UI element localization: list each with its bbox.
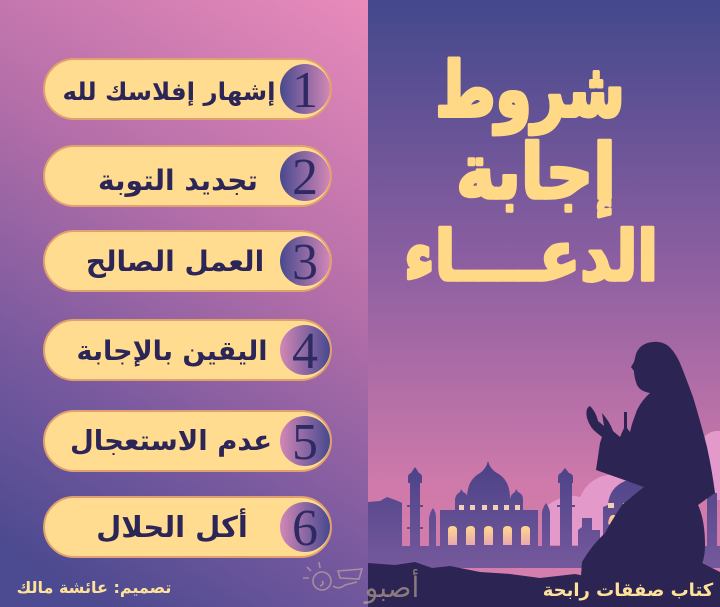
- list item 4: اليقين بالإجابة: [76, 336, 268, 367]
- title: شروط: [435, 47, 625, 135]
- lit windows: [448, 515, 618, 545]
- watermark logo: [303, 562, 419, 604]
- list item 6: [44, 497, 331, 557]
- list item 6: أكل الحلال: [96, 508, 248, 544]
- title: الدعــــاء: [404, 217, 658, 297]
- list item 5: [44, 411, 331, 471]
- book credit: كتاب صفقات رابحة: [543, 580, 714, 601]
- illustration: mosque skyline: [368, 431, 720, 568]
- pale cloud: [545, 474, 690, 545]
- list item 3: 3: [292, 234, 318, 291]
- list item 2: [44, 146, 331, 206]
- list item 3: العمل الصالح: [86, 245, 264, 278]
- list item 6: 6: [292, 500, 318, 557]
- list item 5: عدم الاستعجال: [70, 425, 272, 457]
- illustration: praying woman silhouette: [581, 342, 715, 580]
- watermark logo: أصبو: [363, 568, 419, 604]
- list item 5: 5: [292, 414, 318, 471]
- list item 1: 1: [292, 62, 318, 119]
- list item 1: إشهار إفلاسك لله: [62, 77, 276, 106]
- list item 2: تجديد التوبة: [98, 164, 258, 197]
- list item 4: 4: [292, 323, 318, 380]
- illustration: dark ground: [368, 562, 720, 607]
- list item 4: [44, 320, 331, 380]
- list item 3: [44, 231, 331, 291]
- list item 2: 2: [292, 149, 318, 206]
- designer credit: تصميم: عائشة مالك: [17, 578, 171, 597]
- list item 1: [44, 59, 331, 119]
- panel: right background: [368, 0, 720, 607]
- panel: left background: [0, 0, 368, 607]
- title: إجابة: [456, 128, 616, 217]
- title: [404, 47, 658, 297]
- skyline: [368, 461, 720, 568]
